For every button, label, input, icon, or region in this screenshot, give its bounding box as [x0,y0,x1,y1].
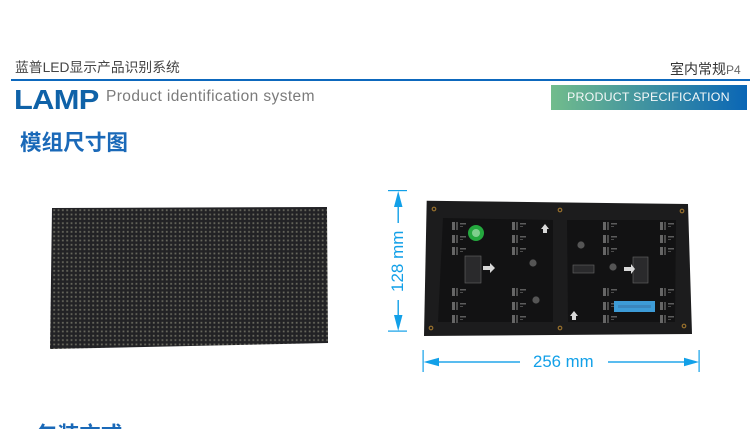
badge: product specification: PRODUCT SPECIFICATION [567,90,730,104]
LED module back photo [424,200,692,336]
driver chips [452,222,674,323]
tagline: Product identification system [106,88,315,105]
dimension: width 256 mm [422,350,700,372]
badge: product specification [551,85,747,110]
LED module front photo [50,207,328,349]
power capacitors [529,241,617,304]
height label: 128 mm [388,231,407,292]
header rule [11,79,750,81]
section heading: 模组尺寸图 [20,130,128,155]
logo: LAMP: LAMP [14,84,99,115]
direction arrows [483,224,635,320]
category label: 室内常规P4 [670,61,741,77]
data connectors [465,256,648,283]
dimension: height 128 mm [388,190,407,332]
header title: 蓝普LED显示产品识别系统 [15,60,180,75]
blue label sticker [614,301,655,312]
green QC sticker [468,225,484,241]
mounting screws [429,207,686,330]
width label: 256 mm [533,352,594,371]
